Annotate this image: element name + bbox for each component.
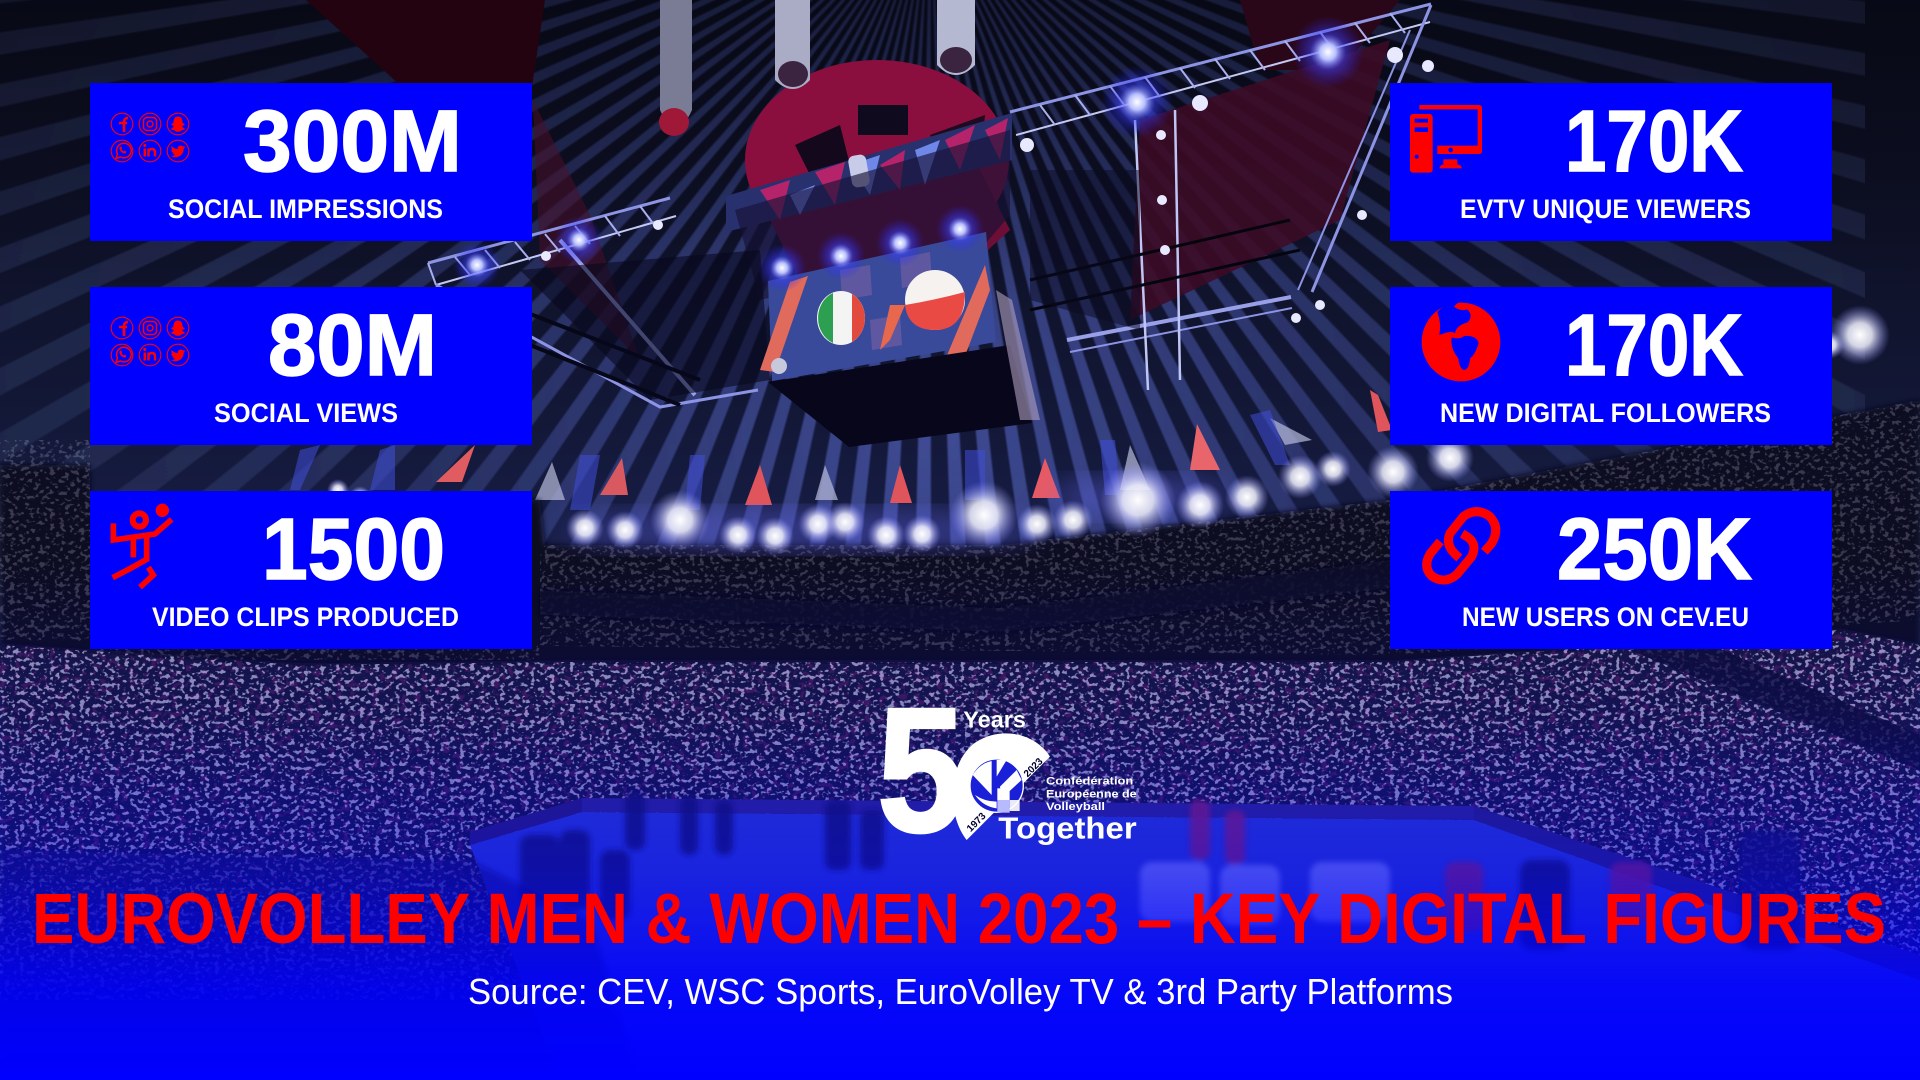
dark stairway wedge and right diagonal beam	[1630, 640, 1920, 770]
text 2023: 2023	[1022, 756, 1046, 780]
hanging tubes	[659, 0, 975, 136]
court floor	[470, 812, 1920, 1080]
advertising boards	[470, 798, 1920, 980]
ceiling radial ribs	[80, 0, 1780, 750]
lights	[453, 16, 1434, 323]
black box below the screen	[768, 345, 1032, 447]
icon: globe	[1422, 301, 1500, 381]
blue gradient overlay	[0, 560, 1920, 1080]
zero half-disc with emblem	[953, 733, 1050, 840]
panel: social impressions	[90, 83, 532, 241]
label: new digital followers: NEW DIGITAL FOLLOWERS	[1440, 398, 1771, 428]
scoreboard banner with geometric pattern	[726, 113, 1012, 300]
number: 1500: 1500	[262, 501, 445, 598]
label: social views: SOCIAL VIEWS	[214, 398, 398, 428]
wordmark Years: Years	[963, 707, 1026, 733]
side of scoreboard	[996, 290, 1040, 420]
video screen with flags	[760, 232, 996, 381]
federation name	[1046, 775, 1137, 813]
hanging pennants	[290, 390, 1392, 510]
foreground players and staff	[0, 790, 1800, 1080]
bright stadium lamps	[327, 305, 1890, 555]
icon: social networks	[111, 317, 189, 366]
federation name: Européenne de	[1046, 788, 1137, 800]
wordmark Together: Together	[998, 811, 1137, 845]
federation name: Confédération	[1046, 775, 1133, 787]
icon: volleyball player	[113, 504, 172, 587]
top darkening	[0, 0, 1920, 300]
icon: chain link	[1427, 512, 1496, 580]
panel: video clips produced	[90, 491, 532, 649]
panel: social views	[90, 287, 532, 445]
number: 80M: 80M	[268, 297, 437, 394]
text 1973: 1973	[965, 811, 989, 834]
truss frame	[428, 4, 1431, 407]
label: new users on cev.eu: NEW USERS ON CEV.EU	[1462, 602, 1749, 632]
icon: desktop computer	[1410, 105, 1482, 173]
label: video clips produced: VIDEO CLIPS PRODUCED	[152, 602, 459, 632]
panel: new users on cev.eu	[1390, 491, 1832, 649]
number: 170K: 170K	[1565, 297, 1743, 394]
number: 250K: 250K	[1557, 501, 1752, 598]
federation name: Volleyball	[1046, 801, 1105, 813]
source line: Source: CEV, WSC Sports, EuroVolley TV & 3rd Party Platforms	[468, 971, 1453, 1012]
number: 300M: 300M	[243, 93, 462, 190]
icon: social networks	[111, 113, 189, 162]
dark upper drapes and red circle	[306, 0, 1400, 360]
label: social impressions: SOCIAL IMPRESSIONS	[168, 194, 443, 224]
label: evtv unique viewers: EVTV UNIQUE VIEWERS	[1460, 194, 1751, 224]
logo: CEV 50 years together	[877, 672, 1137, 869]
upper crowd tier	[0, 400, 1920, 670]
panel: new digital followers	[1390, 287, 1832, 445]
big digit five: 5	[877, 672, 965, 869]
lower crowd stand	[0, 600, 1920, 1000]
number: 170K: 170K	[1565, 93, 1743, 190]
panel: evtv unique viewers	[1390, 83, 1832, 241]
